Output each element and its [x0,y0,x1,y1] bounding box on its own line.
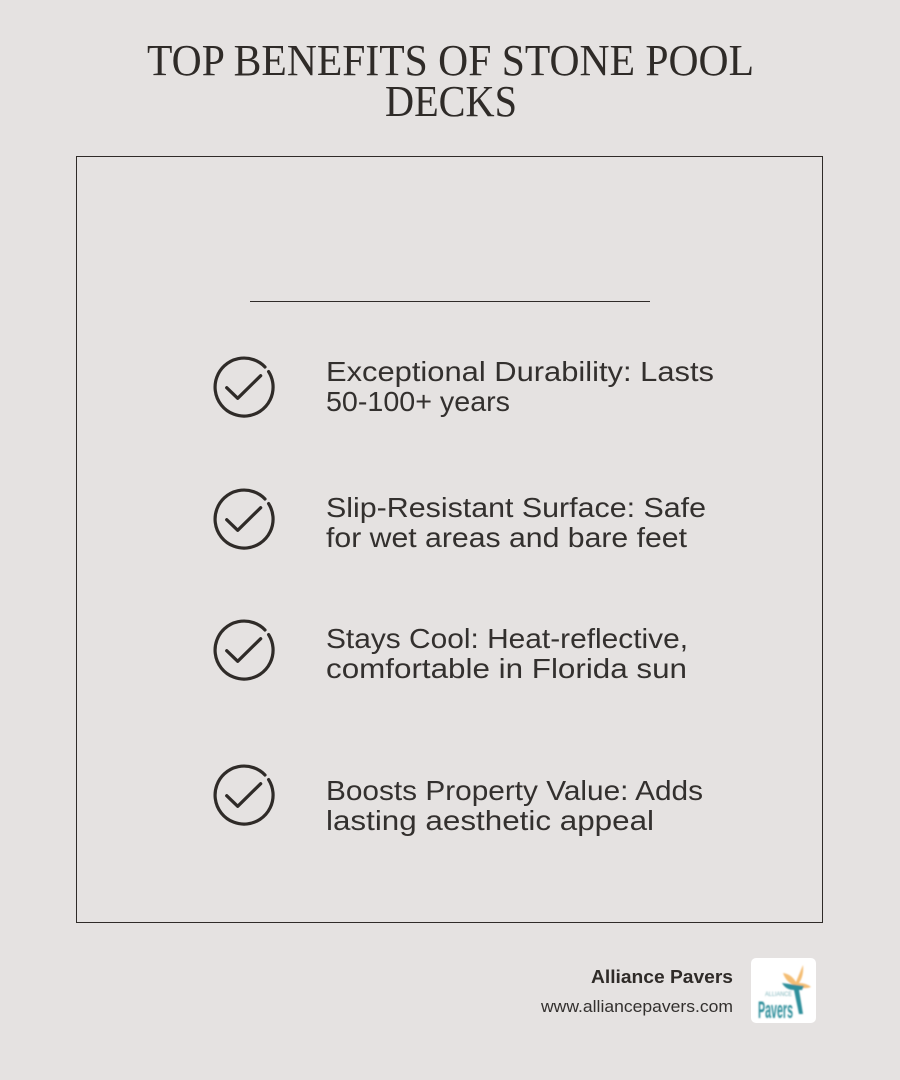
benefit: property value [215,766,703,836]
text: property value: lasting aesthetic appeal [326,805,654,836]
text: stays cool: comfortable in Florida sun [326,653,687,684]
text: durability: 50-100+ years [326,386,510,417]
text: durability: Exceptional Durability: Lasts [326,356,714,387]
benefit: stays cool [215,621,688,684]
panel: benefits list [76,156,822,922]
benefit: durability [215,356,714,417]
icon: Alliance Pavers logo: Pavers [758,997,793,1024]
title: TOP BENEFITS OF STONE POOL [147,36,754,85]
title: DECKS [385,77,517,126]
icon: Alliance Pavers logo [751,958,816,1024]
icon: check circle [215,766,273,824]
text: slip resistance: Slip-Resistant Surface: Safe [326,492,706,523]
text: property value: Boosts Property Value: Adds [326,775,703,806]
footer: brand name and website: Alliance Pavers [591,967,733,987]
text: slip resistance: for wet areas and bare feet [326,522,687,553]
icon: check circle [215,621,273,679]
text: durability [326,356,714,417]
text: stays cool: Stays Cool: Heat-reflective, [326,623,688,654]
text: property value [326,775,703,836]
footer: brand name and website: www.alliancepavers.com [540,997,733,1016]
title [147,36,754,126]
icon: Alliance Pavers logo: ALLIANCE [765,992,792,998]
text: slip resistance [326,492,706,553]
benefit: slip resistance [215,490,706,553]
footer: brand name and website [540,967,733,1016]
icon: check circle [215,490,273,548]
icon: check circle [215,358,273,416]
text: stays cool [326,623,688,684]
